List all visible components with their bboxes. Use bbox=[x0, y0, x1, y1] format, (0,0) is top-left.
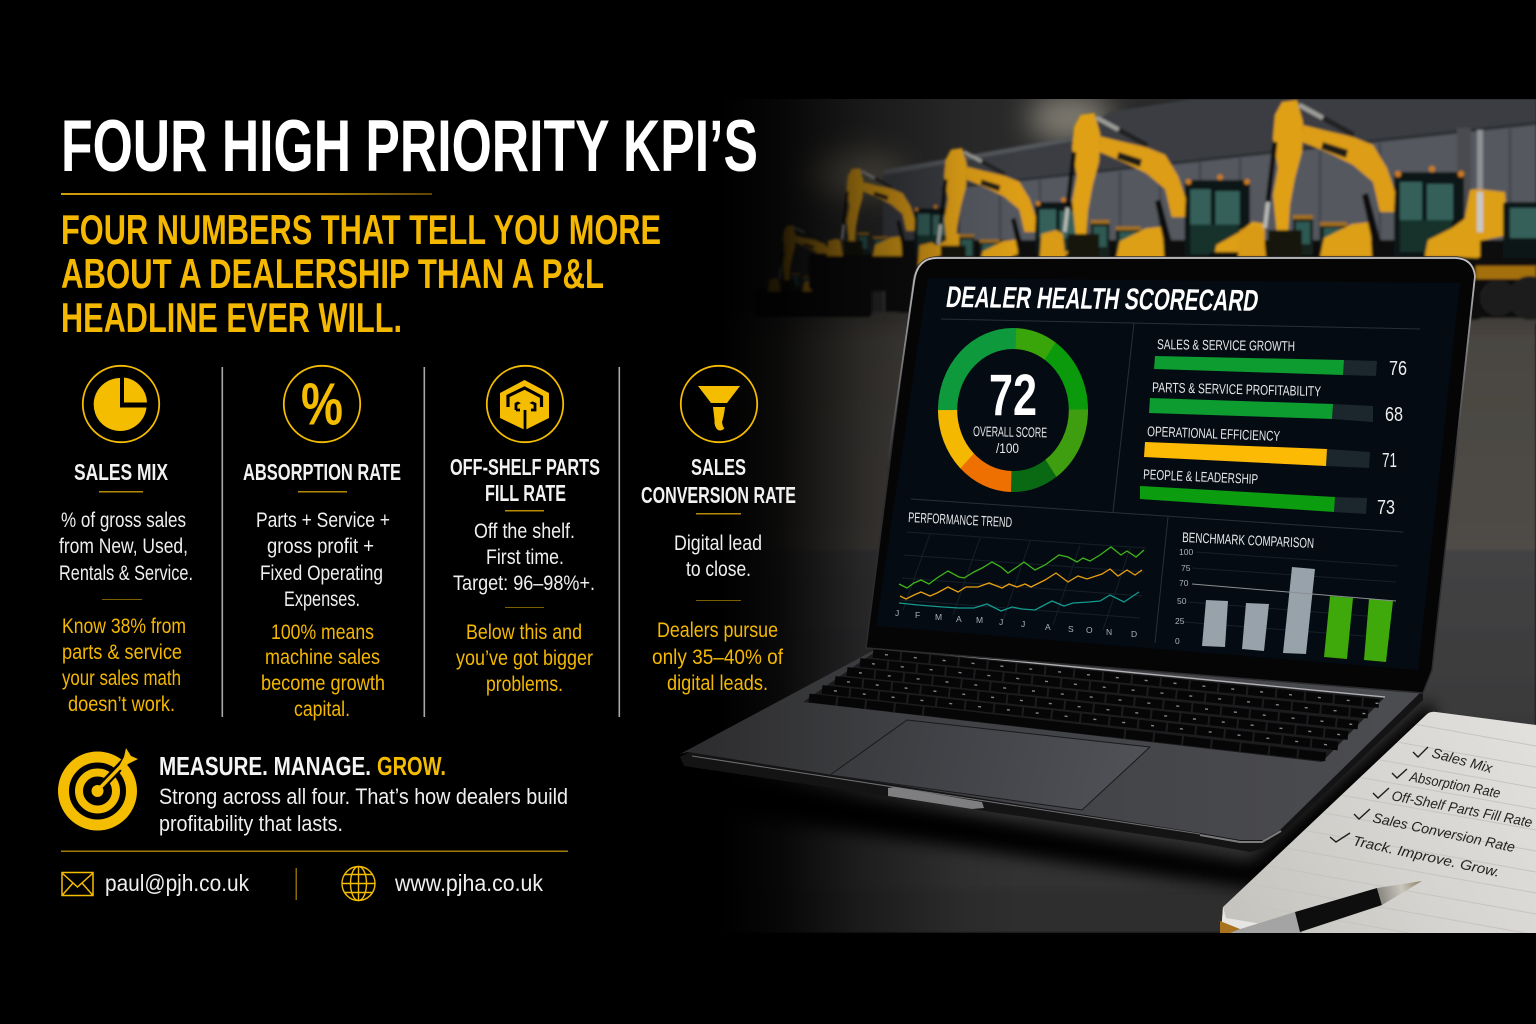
heading: sales conversion rate: CONVERSION RATE bbox=[641, 482, 796, 508]
definition text: Parts + Service + bbox=[256, 508, 390, 532]
contact: website bbox=[342, 866, 543, 900]
heading: off-shelf parts fill rate bbox=[450, 454, 600, 506]
callout: measure manage grow: GROW. bbox=[377, 751, 446, 781]
metric: operational efficiency bbox=[1144, 426, 1396, 468]
title: FOUR HIGH PRIORITY KPI’S bbox=[61, 106, 758, 187]
performance trend chart: M bbox=[935, 612, 942, 622]
metric: people and leadership bbox=[1140, 469, 1394, 514]
icon: pie chart bbox=[83, 366, 159, 442]
notebook bbox=[1220, 712, 1536, 933]
performance trend chart: N bbox=[1106, 627, 1112, 637]
insight text: become growth bbox=[261, 671, 385, 695]
callout: measure manage grow: MEASURE. MANAGE. bbox=[159, 751, 371, 781]
heading: absorption rate: ABSORPTION RATE bbox=[243, 459, 401, 485]
performance trend chart: PERFORMANCE TREND bbox=[908, 509, 1013, 530]
metric: people and leadership: 73 bbox=[1377, 497, 1395, 519]
insight text: problems. bbox=[486, 672, 563, 696]
insight text: you’ve got bigger bbox=[456, 646, 593, 670]
definition text: Digital lead bbox=[674, 531, 762, 555]
definition text: gross profit + bbox=[267, 534, 374, 558]
definition text: % of gross sales bbox=[61, 508, 186, 532]
benchmark comparison chart: 0 bbox=[1175, 636, 1180, 646]
metric: people and leadership: PEOPLE & LEADERSHIP bbox=[1143, 466, 1258, 487]
definition text: First time. bbox=[486, 545, 564, 569]
notebook checklist: Absorption Rate bbox=[1408, 768, 1502, 801]
definition text: Fixed Operating bbox=[260, 561, 383, 585]
column dividers bbox=[222, 367, 620, 717]
notebook checklist bbox=[1330, 744, 1534, 880]
callout: measure manage grow: Strong across all four. That’s how dealers build bbox=[159, 784, 568, 809]
contact: website: www.pjha.co.uk bbox=[394, 870, 543, 896]
trackpad bbox=[830, 720, 1150, 810]
laptop bbox=[680, 257, 1475, 890]
panel: sales conversion rate bbox=[641, 366, 796, 695]
insight text: Know 38% from bbox=[62, 614, 186, 638]
definition text: from New, Used, bbox=[59, 534, 188, 558]
performance trend chart: J bbox=[1021, 619, 1025, 629]
icon: target with arrow bbox=[64, 748, 138, 825]
contact: email: paul@pjh.co.uk bbox=[105, 870, 249, 896]
icon: funnel bbox=[681, 366, 757, 442]
insight text: 100% means bbox=[271, 620, 374, 644]
performance trend chart: O bbox=[1086, 625, 1093, 635]
performance trend chart: D bbox=[1131, 629, 1137, 639]
panel: sales mix bbox=[59, 366, 193, 716]
laptop lid bbox=[866, 257, 1475, 693]
callout: measure manage grow: profitability that lasts. bbox=[159, 811, 343, 836]
metric: operational efficiency: OPERATIONAL EFFICIENCY bbox=[1147, 423, 1281, 444]
insight text bbox=[62, 614, 186, 716]
panel: absorption rate bbox=[243, 366, 401, 721]
performance trend chart: S bbox=[1068, 624, 1074, 634]
benchmark comparison chart bbox=[1175, 529, 1398, 662]
score donut: 72 bbox=[989, 363, 1037, 428]
subheading bbox=[61, 206, 661, 341]
metric: sales and service growth: SALES & SERVICE GROWTH bbox=[1157, 336, 1295, 354]
notebook checklist: Sales Conversion Rate bbox=[1371, 809, 1517, 855]
footer rule bbox=[61, 850, 568, 852]
notebook checklist: Track. Improve. Grow. bbox=[1351, 832, 1501, 880]
laptop base bbox=[680, 646, 1423, 852]
benchmark comparison chart: 70 bbox=[1179, 578, 1189, 588]
metric: parts and service profitability bbox=[1149, 382, 1402, 422]
benchmark comparison chart: 50 bbox=[1177, 596, 1187, 606]
insight text: your sales math bbox=[62, 666, 181, 690]
subheading: FOUR NUMBERS THAT TELL YOU MORE bbox=[61, 206, 661, 253]
insight text: machine sales bbox=[265, 645, 380, 669]
metric: parts and service profitability: 68 bbox=[1385, 404, 1403, 426]
dashboard screen bbox=[876, 278, 1460, 670]
insight text: digital leads. bbox=[667, 671, 768, 695]
keyboard bbox=[803, 648, 1385, 762]
benchmark comparison chart: 100 bbox=[1179, 547, 1193, 557]
infographic canvas bbox=[58, 99, 1536, 933]
insight text: parts & service bbox=[62, 640, 182, 664]
score donut: /100 bbox=[996, 440, 1019, 456]
performance trend chart: A bbox=[956, 614, 962, 624]
benchmark comparison chart: 25 bbox=[1175, 616, 1185, 626]
heading: off-shelf parts fill rate: OFF-SHELF PARTS bbox=[450, 454, 600, 480]
definition text bbox=[453, 519, 595, 595]
icon: parts box bbox=[487, 366, 563, 442]
notebook checklist: Sales Mix bbox=[1430, 744, 1495, 776]
heading: sales conversion rate bbox=[641, 454, 796, 508]
benchmark comparison chart: BENCHMARK COMPARISON bbox=[1182, 529, 1314, 551]
screen title: DEALER HEALTH SCORECARD bbox=[944, 281, 1261, 318]
definition text bbox=[674, 531, 762, 581]
insight text bbox=[652, 618, 783, 695]
panel: off-shelf parts fill rate bbox=[450, 366, 600, 696]
metric: operational efficiency: 71 bbox=[1382, 450, 1397, 472]
performance trend chart: F bbox=[915, 610, 920, 620]
performance trend chart: A bbox=[1045, 622, 1051, 632]
insight text: Below this and bbox=[466, 620, 582, 644]
heading: off-shelf parts fill rate: FILL RATE bbox=[485, 480, 566, 506]
metric: sales and service growth bbox=[1154, 339, 1406, 376]
insight text: capital. bbox=[294, 697, 350, 721]
definition text: Rentals & Service. bbox=[59, 561, 193, 585]
definition text bbox=[256, 508, 390, 611]
callout: measure manage grow bbox=[159, 751, 568, 836]
performance trend chart: J bbox=[999, 617, 1003, 627]
insight text bbox=[261, 620, 385, 721]
title rule bbox=[61, 193, 432, 195]
performance trend chart: J bbox=[895, 608, 899, 618]
contact divider bbox=[296, 868, 297, 900]
insight text: only 35–40% of bbox=[652, 645, 783, 669]
subheading: HEADLINE EVER WILL. bbox=[61, 294, 402, 341]
performance trend chart bbox=[895, 509, 1146, 639]
insight text bbox=[456, 620, 593, 696]
subheading: ABOUT A DEALERSHIP THAN A P&L bbox=[61, 250, 604, 297]
heading: sales mix: SALES MIX bbox=[74, 459, 168, 485]
laptop front notch bbox=[888, 787, 984, 809]
notebook checklist: Off-Shelf Parts Fill Rate bbox=[1390, 787, 1534, 830]
metric: parts and service profitability: PARTS & SERVICE PROFITABILITY bbox=[1152, 379, 1322, 399]
score donut: OVERALL SCORE bbox=[973, 423, 1047, 440]
score donut bbox=[938, 328, 1088, 492]
pen bbox=[1230, 881, 1422, 933]
benchmark comparison chart: 75 bbox=[1181, 563, 1191, 573]
heading: sales conversion rate: SALES bbox=[691, 454, 746, 480]
photo: excavator yard and desk bbox=[760, 99, 1536, 933]
insight text: Dealers pursue bbox=[657, 618, 778, 642]
metric: sales and service growth: 76 bbox=[1389, 358, 1407, 380]
definition text bbox=[59, 508, 193, 585]
definition text: to close. bbox=[686, 557, 751, 581]
performance trend chart: M bbox=[976, 615, 983, 625]
insight text: doesn’t work. bbox=[68, 692, 175, 716]
icon: percent: % bbox=[301, 372, 343, 438]
definition text: Expenses. bbox=[284, 587, 360, 611]
definition text: Target: 96–98%+. bbox=[453, 571, 595, 595]
definition text: Off the shelf. bbox=[474, 519, 575, 543]
icon: percent bbox=[284, 366, 360, 442]
